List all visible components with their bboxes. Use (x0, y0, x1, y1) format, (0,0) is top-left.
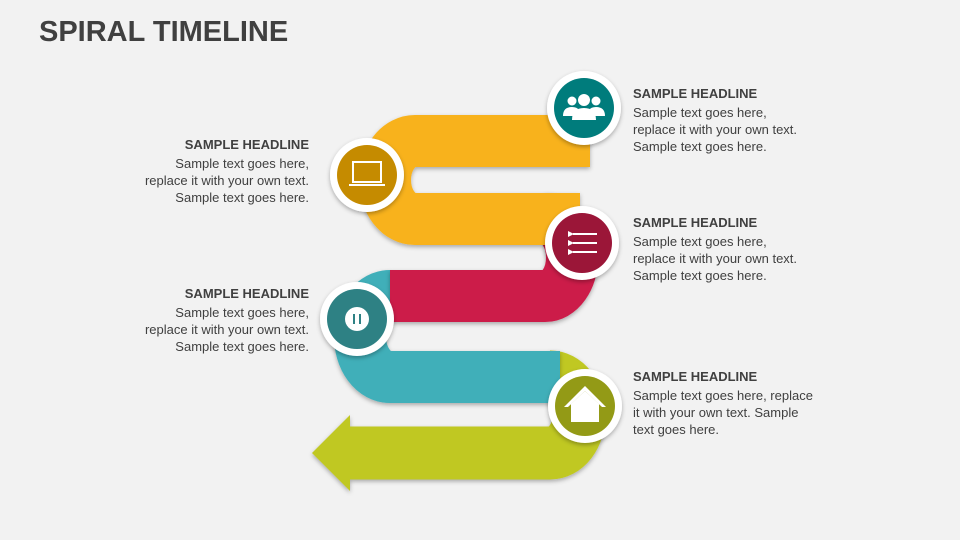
text: top left: Sample text goes here. (175, 190, 309, 205)
text: right 2: SAMPLE HEADLINE (633, 215, 757, 230)
text: right 3: Sample text goes here, replace (633, 388, 813, 403)
text: right 1 (633, 86, 797, 154)
text: bottom left (145, 286, 309, 354)
text: top left: Sample text goes here, (175, 156, 309, 171)
title: SPIRAL TIMELINE (39, 16, 288, 48)
text: bottom left: Sample text goes here. (175, 339, 309, 354)
icon: house (548, 369, 622, 443)
text: right 1: Sample text goes here. (633, 139, 767, 154)
text: right 3: it with your own text. Sample (633, 405, 798, 420)
text: right 1: Sample text goes here, (633, 105, 767, 120)
text: right 3 (633, 369, 813, 437)
text: right 2: replace it with your own text. (633, 251, 797, 266)
text: right 3: text goes here. (633, 422, 719, 437)
text: right 2 (633, 215, 797, 283)
text: right 3: SAMPLE HEADLINE (633, 369, 757, 384)
text: bottom left: replace it with your own text. (145, 322, 309, 337)
icon: list (545, 206, 619, 280)
text: top left (145, 137, 309, 205)
text: top left: replace it with your own text. (145, 173, 309, 188)
text: top left: SAMPLE HEADLINE (185, 137, 309, 152)
band: red (390, 219, 572, 296)
text: bottom left: Sample text goes here, (175, 305, 309, 320)
text: bottom left: SAMPLE HEADLINE (185, 286, 309, 301)
band: yellow (385, 141, 590, 219)
text: right 2: Sample text goes here, (633, 234, 767, 249)
band: teal (360, 296, 560, 377)
text: right 1: SAMPLE HEADLINE (633, 86, 757, 101)
icon: people (547, 71, 621, 145)
icon: laptop (330, 138, 404, 212)
band: green arrow (312, 377, 579, 491)
text: right 1: replace it with your own text. (633, 122, 797, 137)
text: right 2: Sample text goes here. (633, 268, 767, 283)
icon: pause (320, 282, 394, 356)
